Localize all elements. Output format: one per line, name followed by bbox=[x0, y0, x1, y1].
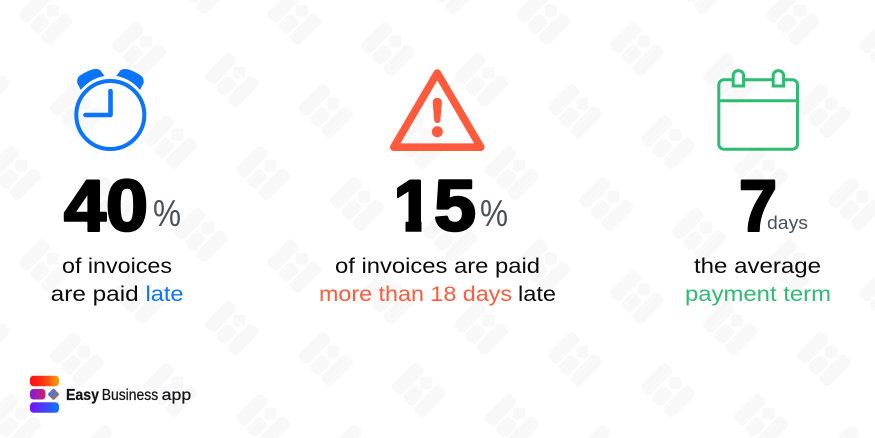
caption: of invoices are paid late: are paid bbox=[51, 282, 139, 306]
caption: of invoices are paid more than 18 days late bbox=[319, 254, 556, 306]
statistic: 15% bbox=[397, 179, 507, 232]
statistic: 15%: % bbox=[480, 193, 508, 234]
caption: the average payment term: payment term bbox=[685, 282, 831, 306]
caption: of invoices are paid late: of invoices bbox=[62, 254, 172, 278]
statistic: 7 days: 7 bbox=[739, 166, 777, 246]
caption: of invoices are paid more than 18 days late: more than 18 days bbox=[319, 282, 512, 306]
caption: of invoices are paid late bbox=[51, 254, 184, 306]
wordmark bbox=[66, 387, 191, 404]
caption: of invoices are paid late: late bbox=[146, 282, 184, 306]
caption: the average payment term bbox=[685, 254, 831, 306]
statistic: 15%: 1 bbox=[393, 166, 433, 246]
caption: the average payment term: the average bbox=[694, 254, 821, 278]
caption: of invoices are paid more than 18 days late: of invoices are paid bbox=[335, 254, 540, 278]
statistic: 7 days bbox=[739, 166, 808, 246]
icon: logo mark bbox=[30, 376, 60, 413]
statistic: 7 days: days bbox=[767, 213, 808, 233]
icon: warning triangle bbox=[394, 73, 481, 147]
statistic: 40%: % bbox=[153, 193, 181, 234]
panel: 40% of invoices are paid late bbox=[51, 69, 184, 306]
wordmark: Business bbox=[102, 387, 158, 404]
caption: of invoices are paid more than 18 days late: late bbox=[518, 282, 556, 306]
wordmark: Easy bbox=[66, 387, 99, 404]
statistic: 40% bbox=[64, 166, 181, 246]
icon: calendar bbox=[719, 71, 798, 149]
wordmark: app bbox=[162, 387, 191, 404]
statistic: 40%: 40 bbox=[64, 166, 148, 246]
icon: alarm clock bbox=[76, 69, 144, 149]
statistic: 15%: 5 bbox=[434, 166, 476, 246]
logo: Easy Business app bbox=[30, 376, 191, 413]
panel: 15% of invoices are paid more than 18 days late bbox=[319, 73, 556, 306]
panel: 7 days average payment term bbox=[685, 71, 831, 306]
